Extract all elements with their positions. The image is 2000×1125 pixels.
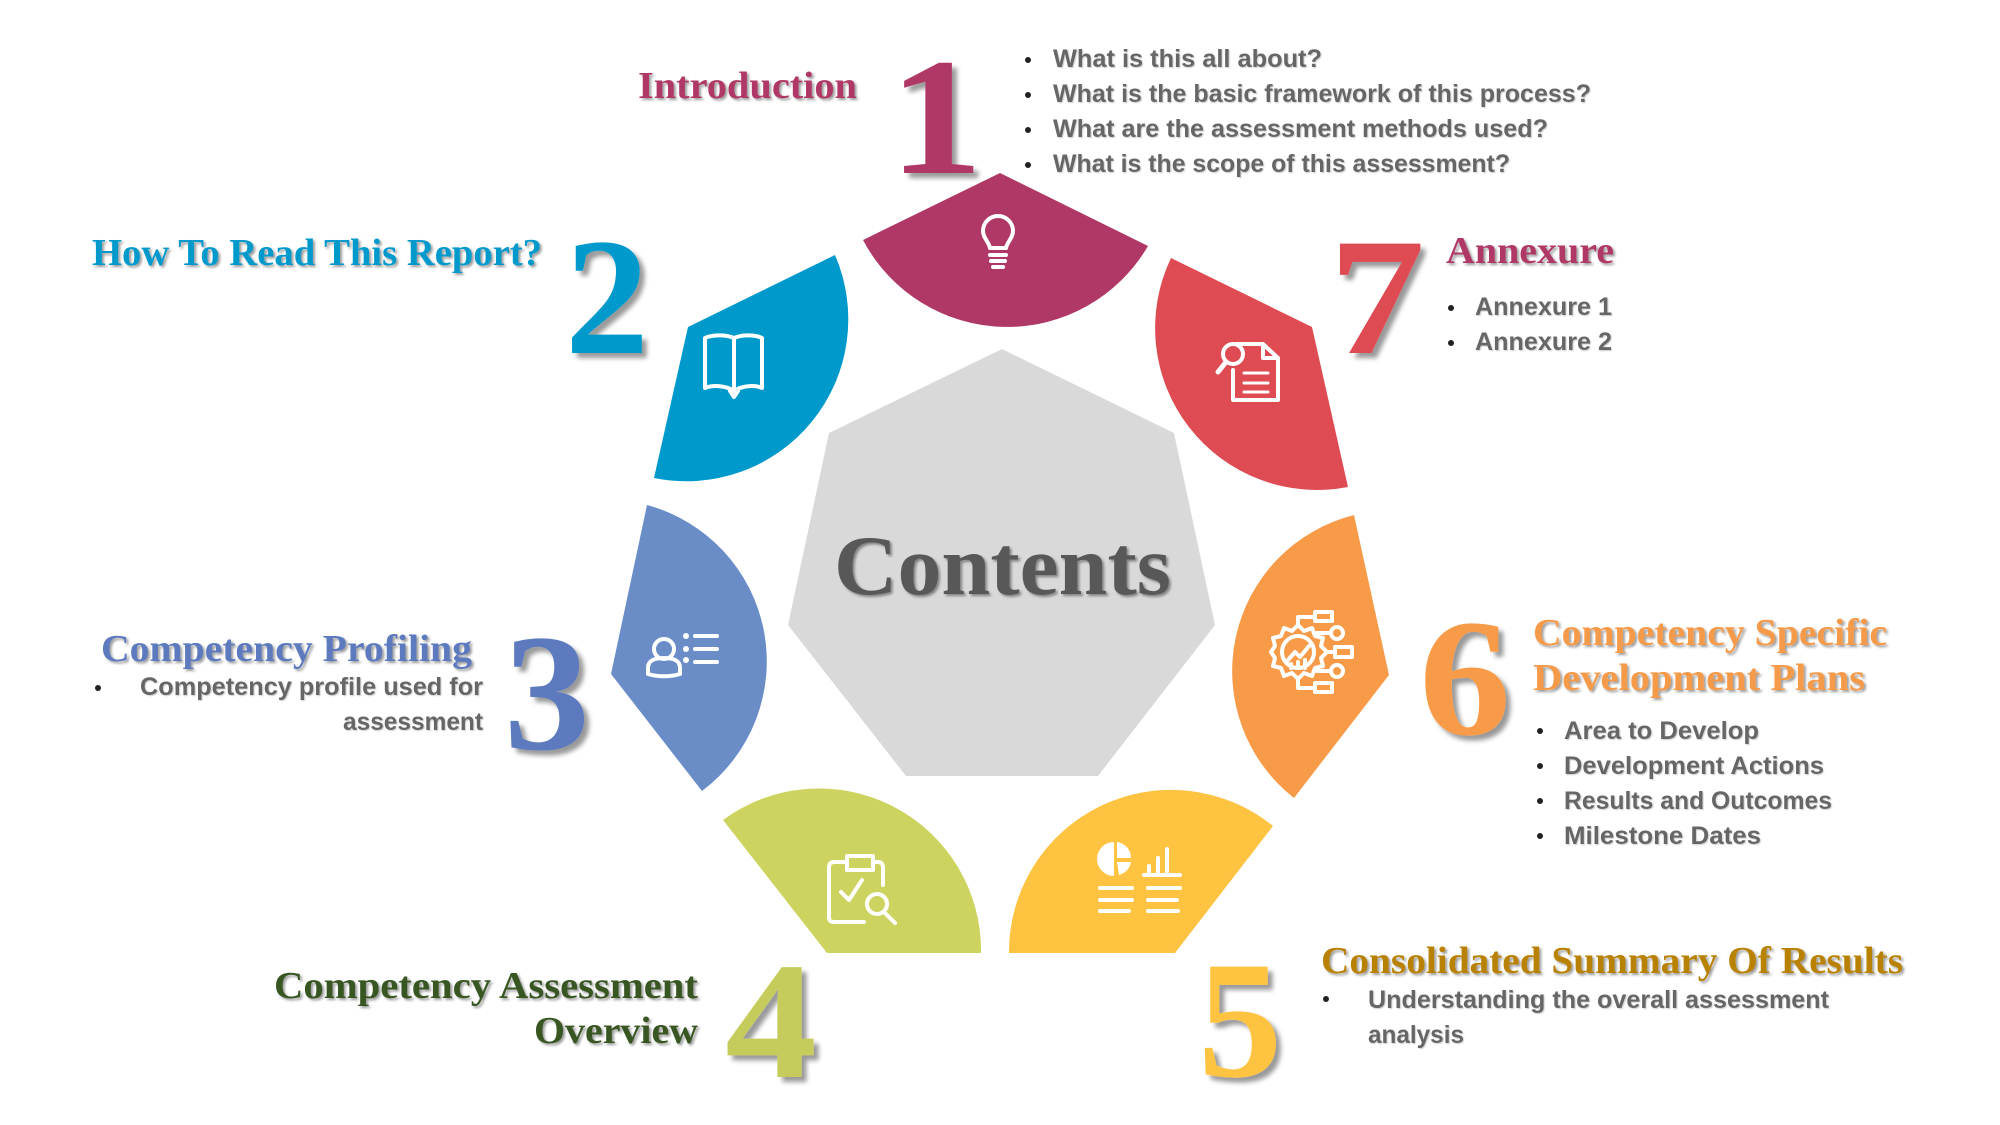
number 6: 6 [1419,586,1511,771]
panel: 7 Annexure [1155,205,1614,490]
bullet list: Milestone Dates [1564,822,1761,850]
bullet text [95,673,484,736]
heading: Competency Profiling [101,628,472,670]
petal 3 [611,505,767,791]
bullet list [1537,717,1832,850]
bullet list: Results and Outcomes [1564,787,1832,815]
number 5: 5 [1198,928,1282,1113]
petal 6 [1232,515,1389,798]
bullet list: What are the assessment methods used? [1053,115,1548,143]
heading: Annexure [1446,230,1614,272]
number 4: 4 [725,929,817,1114]
title: Contents: Contents [834,519,1171,613]
number 3: 3 [504,601,590,786]
icon: person list [648,633,717,676]
center heptagon [788,349,1215,776]
number 7: 7 [1329,205,1425,390]
petal 4 [723,788,981,953]
bullet list: Development Actions [1564,752,1824,780]
icon: light bulb [983,216,1013,267]
heading: Development Plans [1533,657,1865,699]
bullet list: Area to Develop [1564,717,1759,745]
icon: gear with nodes [1271,612,1352,692]
heading: Competency Specific [1533,612,1887,654]
heading: Consolidated Summary Of Results [1321,940,1903,982]
icon: clipboard check [829,856,895,923]
heading: How To Read This Report? [92,232,542,274]
icon: charts and lines [1097,842,1180,911]
bullet text: analysis [1368,1021,1464,1049]
petal 5 [1009,790,1273,953]
number 1: 1 [889,25,983,210]
number 2: 2 [565,205,649,390]
heading [274,965,699,1052]
bullet list: What is the basic framework of this process? [1053,80,1591,108]
icon: document search [1218,344,1278,400]
petal 1 [863,173,1148,327]
panel: 4 Competency Assessment Overview [274,788,981,1114]
panel: 2 How To Read This Report [92,205,848,481]
heading [1533,612,1887,699]
bullet text: Competency profile used for [140,673,483,701]
heading: Competency Assessment [274,965,698,1007]
petal 7 [1155,258,1348,490]
panel: 3 Competency Profiling [95,505,767,791]
bullet list [1025,45,1591,178]
heading: Introduction [638,65,857,107]
bullet list: Annexure 1 [1475,293,1612,321]
panel: 1 Introduction [638,25,1591,327]
panel: 5 Consolidated Summary Of Results [1009,790,1903,1113]
petal 2 [654,255,848,481]
icon: book [705,335,762,397]
bullet text: assessment [343,708,484,736]
bullet list: What is this all about? [1053,45,1322,73]
bullet text [1323,986,1830,1049]
heading: Overview [534,1010,699,1052]
bullet list [1448,293,1612,356]
bullet list: Annexure 2 [1475,328,1612,356]
bullet text: Understanding the overall assessment [1368,986,1830,1014]
bullet list: What is the scope of this assessment? [1053,150,1510,178]
panel: 6 Competency Specific Development Plans [1232,515,1887,850]
